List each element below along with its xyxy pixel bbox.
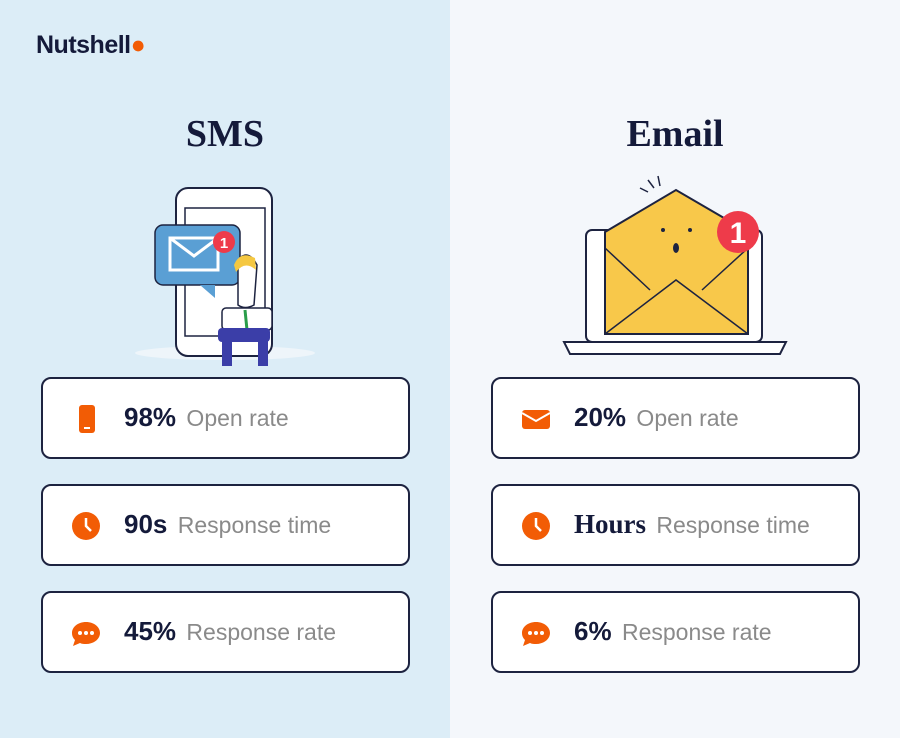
- card: Email response time: [491, 484, 860, 566]
- card: Email open rate: 20% Open rate: [574, 402, 739, 432]
- card: Email response time: Hours Response time: [574, 509, 810, 539]
- illustration: laptop with envelope: [562, 176, 788, 355]
- card: SMS open rate: 98% Open rate: [124, 402, 289, 432]
- card: SMS response rate: [41, 591, 410, 673]
- icon: clock: [72, 512, 100, 540]
- card: SMS response rate: 45% Response rate: [124, 616, 336, 646]
- icon: chat: [72, 622, 100, 646]
- heading: Email: Email: [626, 113, 724, 155]
- illustration: phone with person: [135, 187, 315, 366]
- card: SMS response time: [41, 484, 410, 566]
- icon: envelope: [522, 410, 550, 429]
- card: Email open rate: [491, 377, 860, 459]
- card: SMS response time: 90s Response time: [124, 509, 331, 539]
- card: Email response rate: 6% Response rate: [574, 616, 772, 646]
- card: Email response rate: [491, 591, 860, 673]
- logo: Nutshell●: [36, 31, 145, 59]
- heading: SMS: SMS: [186, 113, 264, 155]
- illustration: laptop with envelope: 1: [730, 217, 746, 250]
- icon: chat: [522, 622, 550, 646]
- icon: phone: [79, 405, 95, 433]
- illustration: phone with person: 1: [220, 235, 228, 252]
- icon: clock: [522, 512, 550, 540]
- card: SMS open rate: [41, 377, 410, 459]
